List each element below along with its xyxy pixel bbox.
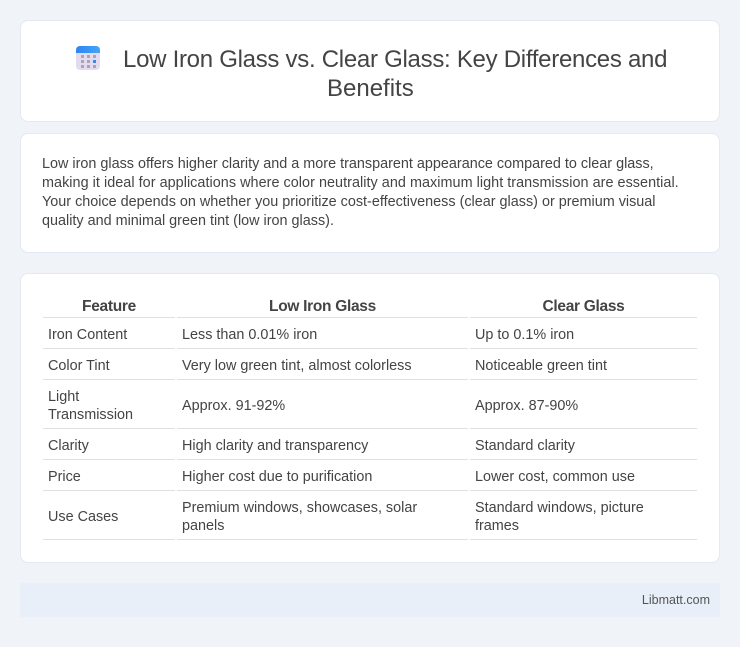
header: clear glass: Clear Glass — [542, 298, 624, 315]
title: Low Iron Glass vs. Clear Glass: Key Differences and — [123, 46, 667, 73]
row: use cases: Use Cases — [48, 509, 118, 525]
header: low iron glass: Low Iron Glass — [269, 298, 376, 315]
row: light transmission: Approx. 91-92% — [182, 398, 285, 414]
intro paragraph: quality and minimal green tint (low iron glass). — [42, 213, 334, 229]
row: use cases: panels — [182, 518, 224, 534]
row: light transmission: Transmission — [48, 407, 133, 423]
row: light transmission: Approx. 87-90% — [475, 398, 578, 414]
row: use cases — [48, 500, 644, 534]
icon: calendar — [76, 46, 100, 70]
row: use cases: Standard windows, picture — [475, 500, 644, 516]
title: Benefits — [327, 75, 414, 102]
row: light transmission: Light — [48, 389, 79, 405]
header panel — [20, 20, 720, 122]
row: color tint — [48, 358, 607, 374]
row: iron content — [48, 327, 574, 343]
intro text panel — [20, 133, 720, 253]
comparison table panel — [20, 273, 720, 563]
table header row — [82, 298, 624, 315]
row: price: Price — [48, 469, 81, 485]
title — [123, 46, 667, 102]
header: feature: Feature — [82, 298, 136, 315]
row: iron content: Up to 0.1% iron — [475, 327, 574, 343]
row: color tint: Color Tint — [48, 358, 110, 374]
intro paragraph: making it ideal for applications where color neutrality and maximum light transmission are essential. — [42, 175, 679, 191]
footer bar — [20, 583, 720, 617]
intro paragraph: Your choice depends on whether you prioritize cost-effectiveness (clear glass) or premium visual — [42, 194, 656, 210]
intro paragraph: Low iron glass offers higher clarity and a more transparent appearance compared to clear glass, — [42, 156, 654, 172]
row: clarity: High clarity and transparency — [182, 438, 368, 454]
row: price: Lower cost, common use — [475, 469, 635, 485]
intro paragraph — [42, 156, 679, 229]
row: use cases: frames — [475, 518, 519, 534]
row: clarity: Standard clarity — [475, 438, 575, 454]
row: use cases: Premium windows, showcases, solar — [182, 500, 417, 516]
footer credit: Libmatt.com — [642, 593, 710, 607]
row: color tint: Noticeable green tint — [475, 358, 607, 374]
row: iron content: Less than 0.01% iron — [182, 327, 317, 343]
row: light transmission — [48, 389, 578, 423]
row: price: Higher cost due to purification — [182, 469, 372, 485]
row: iron content: Iron Content — [48, 327, 127, 343]
row: clarity — [48, 438, 575, 454]
row: price — [48, 469, 635, 485]
row: color tint: Very low green tint, almost colorless — [182, 358, 412, 374]
row: clarity: Clarity — [48, 438, 89, 454]
